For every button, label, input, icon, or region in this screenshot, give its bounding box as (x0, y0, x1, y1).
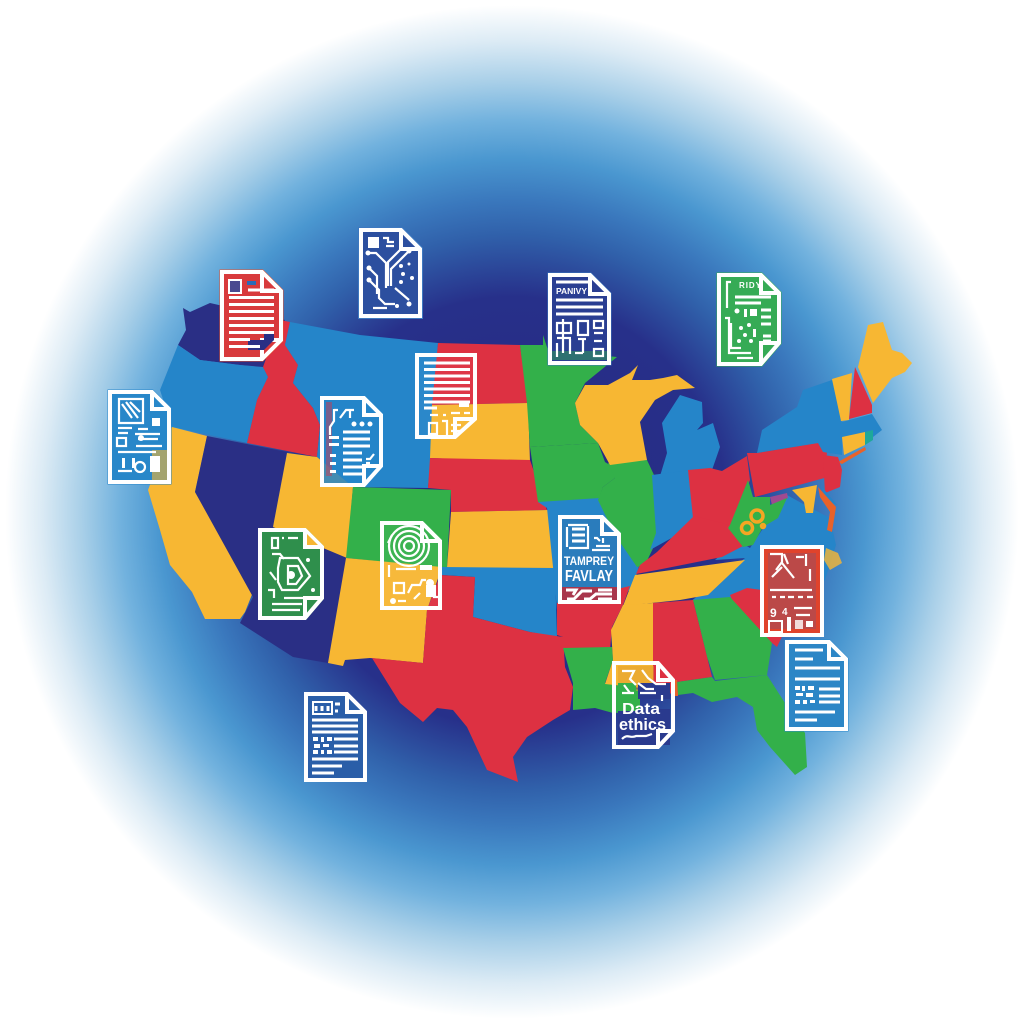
document label: first line: TAMPREY (564, 554, 614, 568)
document: red, southeast: 9 (770, 606, 777, 620)
state: Connecticut (842, 432, 865, 455)
state: Iowa (530, 443, 615, 502)
state: Delaware (822, 487, 837, 505)
state: Minnesota (520, 335, 617, 447)
state: Missouri (538, 498, 640, 610)
state: Washington (178, 303, 285, 368)
document: blue, lower right (787, 642, 846, 729)
state: Kansas (447, 510, 555, 568)
document: green, southwest (260, 530, 322, 618)
document: translucent, centre north (417, 355, 475, 437)
state: Maryland (792, 485, 817, 513)
document: transparency (560, 517, 619, 602)
document: red, southeast: 4 (782, 607, 788, 618)
state: Texas (372, 575, 573, 782)
map of United States (148, 303, 912, 782)
state: Rhode Island (865, 430, 873, 445)
state: California (148, 427, 253, 619)
state: Massachusetts (842, 414, 882, 437)
state: Oklahoma (442, 567, 557, 637)
Gulf coast sliver (672, 680, 678, 696)
state: Virginia shore (818, 487, 836, 532)
document: green, top right (719, 275, 779, 364)
state: Virginia and North Carolina (690, 495, 836, 605)
document label: RIDY (739, 281, 762, 290)
state: South Dakota (430, 403, 530, 462)
state: Long Island (838, 447, 866, 464)
state: Pennsylvania (747, 443, 828, 497)
state: Georgia (693, 597, 772, 680)
state: North Dakota (432, 343, 528, 405)
state: Nebraska (428, 458, 547, 512)
state: Kentucky (636, 516, 743, 574)
state: Vermont (832, 373, 852, 421)
state: Maine (858, 322, 912, 403)
document: blue, circuit, centre west (322, 398, 381, 485)
document label: Data: Data (622, 701, 660, 718)
state: Tennessee (623, 560, 745, 606)
state: New York (757, 380, 842, 455)
state: Ohio (688, 456, 750, 527)
document: red, southeast (762, 547, 822, 635)
document: blue, left (110, 392, 169, 482)
state: New Jersey (823, 455, 842, 493)
document: data ethics (614, 663, 673, 747)
document label: second line: FAVLAY (565, 568, 613, 585)
state: Nevada and Arizona (195, 436, 347, 663)
document label: PANIVY (556, 286, 587, 296)
state: New Mexico (328, 558, 442, 666)
state: Arkansas (557, 586, 630, 650)
state: Louisiana (563, 647, 640, 713)
state: Oregon (160, 345, 268, 443)
state: New Hampshire (849, 367, 872, 419)
state: Alabama (653, 600, 712, 695)
state: Mississippi (605, 603, 660, 690)
document: circuit, top (361, 230, 420, 316)
state: West Virginia (728, 480, 787, 547)
state: Florida (677, 675, 807, 775)
state: Montana and Wyoming (285, 322, 438, 488)
state: Idaho (247, 320, 320, 457)
state: Illinois (598, 460, 657, 567)
document: concentric rings, translucent (382, 523, 440, 608)
document: red report (222, 272, 281, 359)
document: navy, top centre (550, 275, 609, 363)
state: Utah (273, 453, 353, 558)
state: Colorado (346, 487, 451, 568)
icon: West Virginia rings (742, 510, 764, 534)
document label: ethics: ethics (619, 715, 666, 734)
Carolina coast shapes (824, 548, 842, 570)
state: South Carolina (730, 588, 790, 647)
state: lower Michigan (660, 395, 720, 476)
state: Washington DC (770, 493, 788, 505)
state: Wisconsin and upper Michigan (575, 365, 695, 465)
document: blue, bottom (306, 694, 365, 780)
state: Indiana (650, 470, 695, 550)
